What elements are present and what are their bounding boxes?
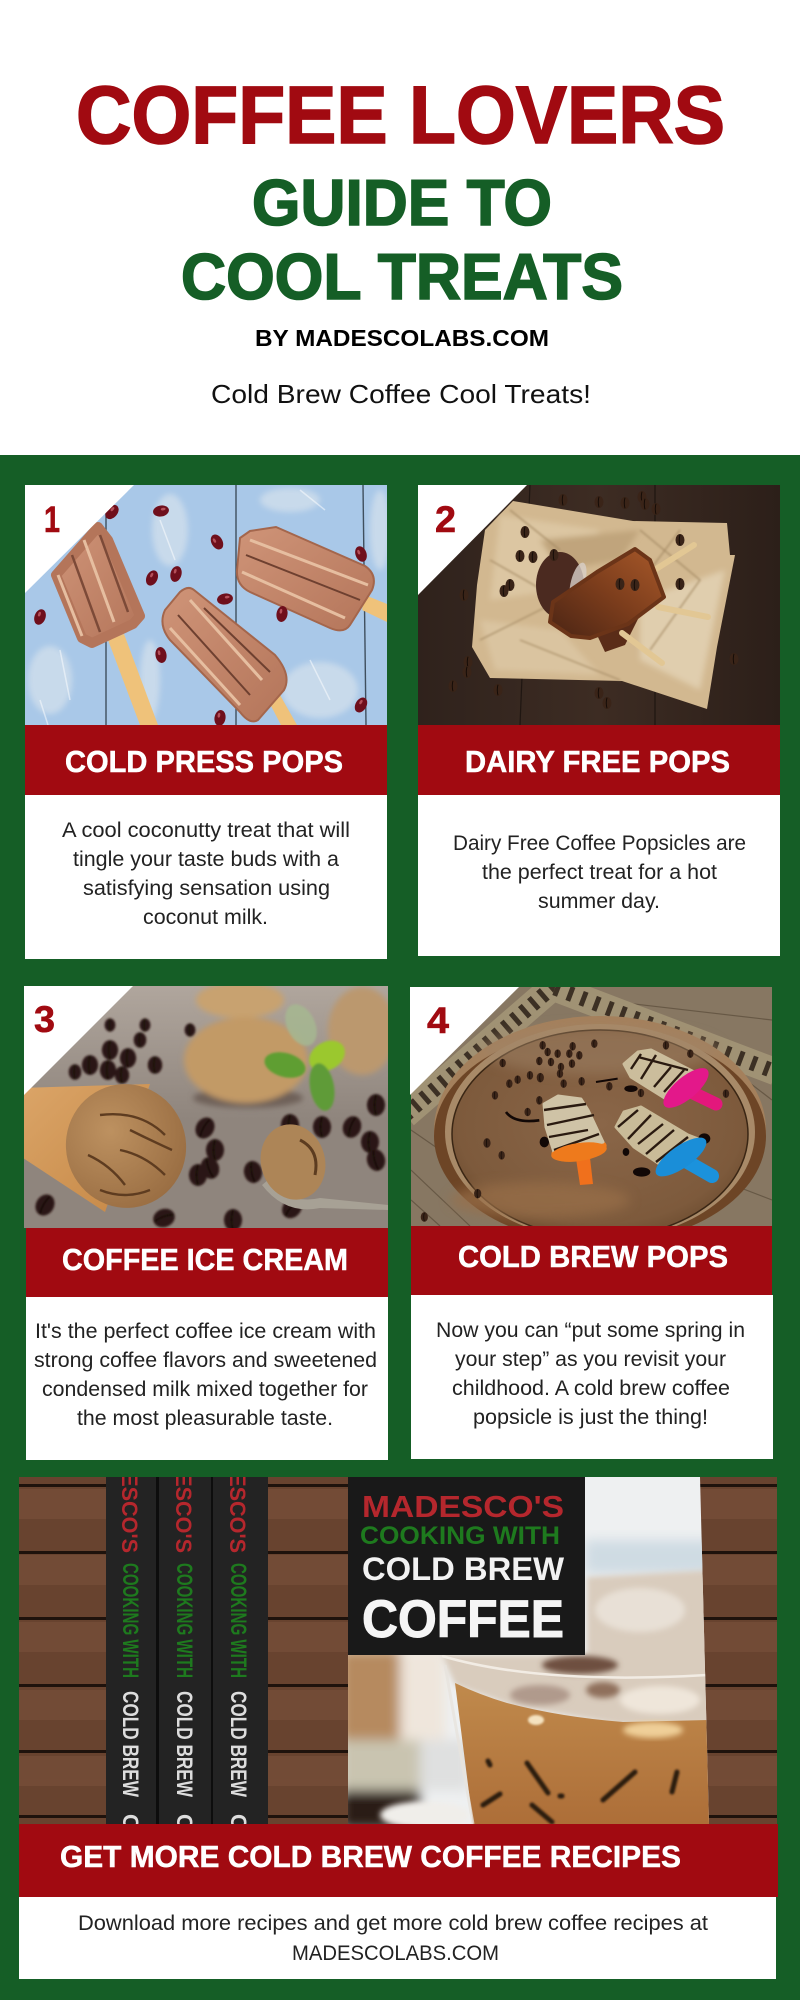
heading: COLD PRESS POPS (65, 744, 343, 779)
number 2: 2 (435, 499, 456, 540)
description text: A cool coconutty treat that will (62, 819, 350, 842)
heading: COFFEE ICE CREAM (62, 1242, 348, 1277)
cover titles: MADESCO'S (362, 1489, 564, 1524)
paper (472, 501, 735, 709)
description text: your step” as you revisit your (455, 1348, 726, 1371)
stick (108, 634, 158, 725)
corner triangle (410, 987, 519, 1095)
spine labels: COFFEE (118, 1814, 143, 1903)
highlights (623, 1722, 683, 1738)
book cover photo (340, 1477, 715, 1830)
photo: dairy free pops on paper (418, 485, 780, 725)
photo: cold press pops on blue planks (25, 485, 390, 727)
description text: It's the perfect coffee ice cream with (35, 1320, 376, 1343)
title: guide to: GUIDE TO (252, 166, 552, 239)
book spines (106, 1477, 268, 1824)
description box (26, 1297, 388, 1460)
spine labels: MADESCO'S (171, 1423, 196, 1553)
ice (442, 1570, 715, 1725)
number 1: 1 (44, 499, 60, 540)
description text (62, 819, 350, 929)
description box (19, 1897, 776, 1979)
photo: cookbook on wood: COOKING WITH (360, 1522, 560, 1550)
spoon scoop (260, 1124, 326, 1200)
panel: get more recipes (19, 1423, 778, 1979)
panel: card 1 cold press pops (25, 485, 390, 959)
spine labels: MADESCO'S (117, 1423, 142, 1553)
title: coffee lovers: COFFEE LOVERS (76, 70, 725, 161)
description text: Now you can “put some spring in (436, 1319, 745, 1342)
spine labels (122, 1477, 246, 1824)
heading band (25, 725, 387, 795)
photo: cookbook on wood: COLD BREW (362, 1551, 565, 1587)
description text: strong coffee flavors and sweetened (34, 1349, 377, 1372)
spine labels: COOKING WITH (118, 1563, 143, 1678)
description text: MADESCOLABS.COM (292, 1942, 499, 1965)
title: cool treats: COOL TREATS (181, 240, 623, 313)
wood planks (19, 1489, 777, 1786)
black cover panel (348, 1477, 585, 1655)
number 4: 4 (427, 1000, 449, 1041)
popsicle A (56, 527, 140, 643)
description box (25, 795, 387, 959)
description text (78, 1912, 708, 1965)
byline: BY MADESCOLABS.COM (255, 325, 549, 351)
blue popsicle (616, 1107, 712, 1183)
beans (448, 491, 738, 709)
spine labels: COLD BREW (226, 1691, 251, 1797)
corner triangle (25, 485, 134, 593)
spine labels: COFFEE (172, 1814, 197, 1903)
description text: Download more recipes and get more cold brew coffee recipes at (78, 1912, 708, 1935)
popsicle B (162, 588, 287, 721)
spine labels: COOKING WITH (172, 1563, 197, 1678)
coffee beans (421, 1039, 729, 1222)
spine labels: COLD BREW (118, 1691, 143, 1797)
dark streaks (483, 1761, 677, 1822)
subtitle: Cold Brew Coffee Cool Treats! (211, 379, 591, 409)
heading: DAIRY FREE POPS (465, 744, 730, 779)
description text: tingle your taste buds with a (73, 848, 339, 871)
description text: popsicle is just the thing! (473, 1406, 708, 1429)
spine labels: COLD BREW (172, 1691, 197, 1797)
cone (20, 1084, 150, 1212)
heading: GET MORE COLD BREW COFFEE RECIPES (60, 1839, 681, 1874)
description text: the most pleasurable taste. (77, 1407, 333, 1430)
carved frame (405, 985, 776, 1115)
description text: the perfect treat for a hot (482, 861, 717, 884)
dark popsicle (536, 552, 584, 618)
beans (105, 504, 119, 520)
heading band (19, 1824, 778, 1897)
heading: COLD BREW POPS (458, 1239, 728, 1274)
pink popsicle (624, 1050, 716, 1114)
photo: coffee ice cream (20, 982, 396, 1231)
glass rim (442, 1656, 707, 1678)
spine labels: COOKING WITH (226, 1563, 251, 1678)
spine labels: COFFEE (226, 1814, 251, 1903)
blurred background (348, 1655, 468, 1824)
description box (418, 795, 780, 956)
photo: cookbook on wood (19, 1477, 777, 1824)
cone scoop (66, 1084, 186, 1208)
description text (34, 1320, 377, 1430)
panel: card 3 coffee ice cream (20, 982, 396, 1460)
description text (453, 832, 746, 913)
sticks (622, 545, 708, 663)
header (76, 70, 725, 409)
photo: cookbook on wood: COFFEE (362, 1590, 564, 1649)
photo: cold brew pops on round board (411, 987, 772, 1226)
description text: satisfying sensation using (83, 877, 330, 900)
description text: childhood. A cold brew coffee (452, 1377, 730, 1400)
description text: coconut milk. (143, 906, 268, 929)
coffee in glass (455, 1683, 712, 1824)
panel: card 2 dairy free pops (418, 485, 780, 956)
glass edge (445, 1665, 473, 1824)
heading band (26, 1228, 388, 1297)
pale sky (585, 1540, 715, 1574)
popsicle C (237, 527, 374, 630)
heading band (411, 1226, 772, 1295)
board (434, 1016, 766, 1132)
number 3: 3 (34, 999, 55, 1040)
amber popsicle (550, 549, 664, 638)
green panel background (0, 455, 800, 2000)
spoon (262, 1180, 388, 1210)
description text: condensed milk mixed together for (42, 1378, 368, 1401)
panel: card 4 cold brew pops (405, 985, 776, 1459)
description text: Dairy Free Coffee Popsicles are (453, 832, 746, 855)
corner triangle (24, 986, 133, 1095)
corner triangle (418, 485, 527, 595)
description text (436, 1319, 745, 1429)
heading band (418, 725, 780, 795)
leaves (263, 1004, 346, 1112)
spine labels: MADESCO'S (225, 1423, 250, 1553)
orange popsicle (544, 1096, 608, 1185)
description text: summer day. (538, 890, 660, 913)
description box (411, 1295, 773, 1459)
